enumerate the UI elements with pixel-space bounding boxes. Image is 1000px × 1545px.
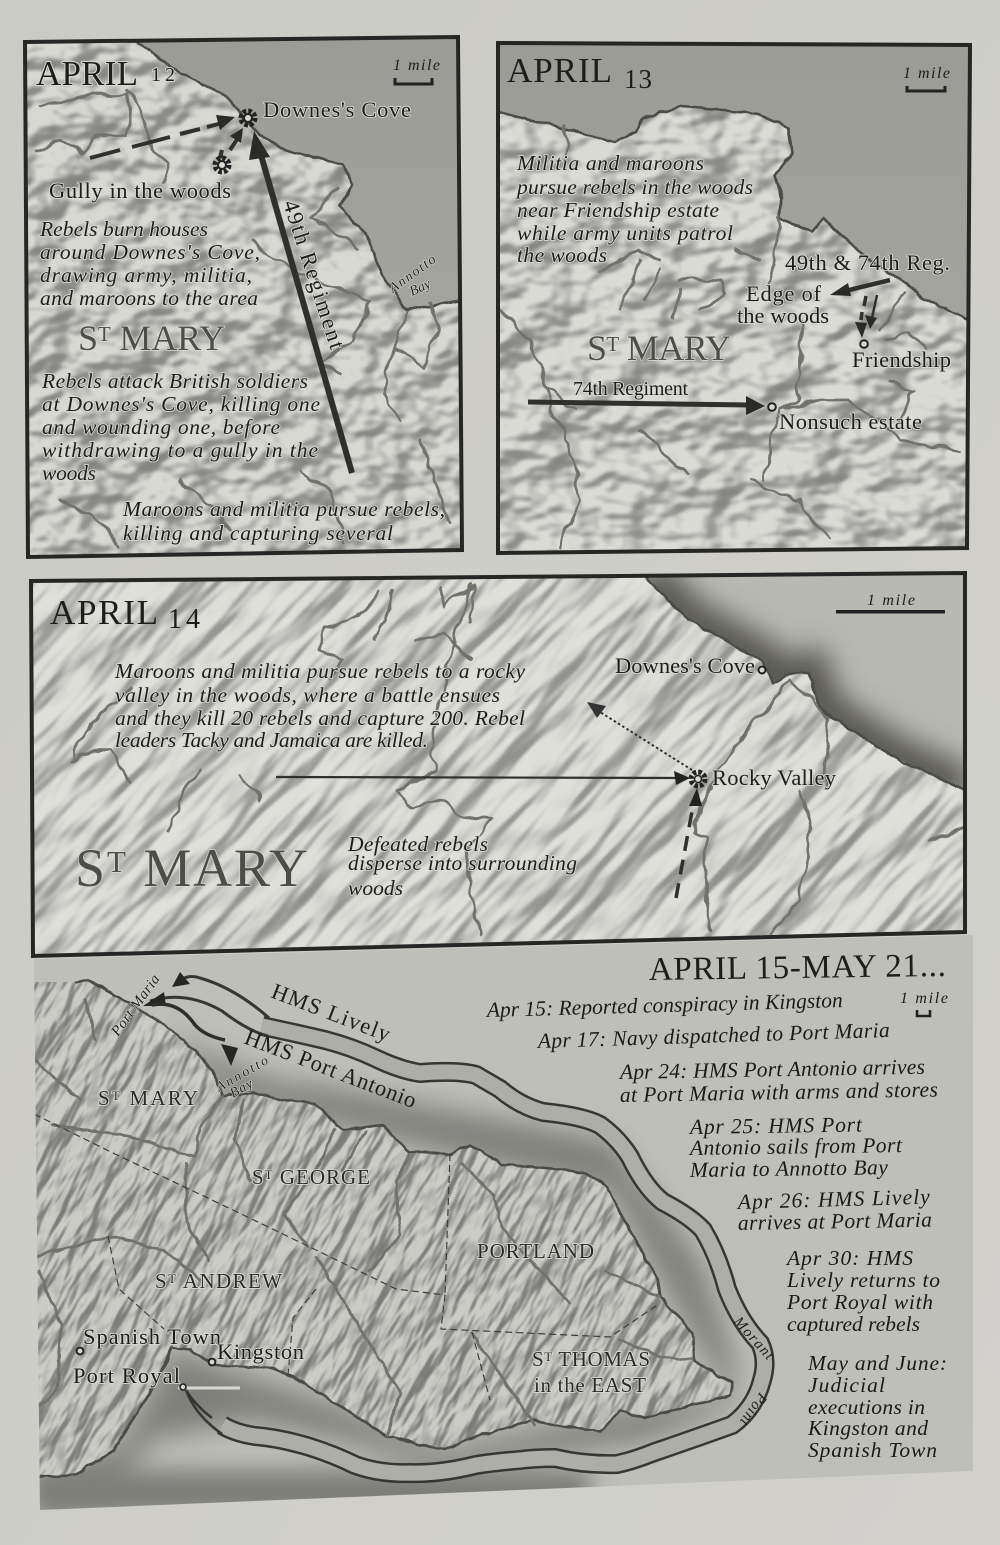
note: maroons and militia pursue rebels: and they kill 20 rebels and capture 200. Rebel (115, 706, 525, 730)
note: rebels burn houses: drawing army, militia, (40, 263, 252, 287)
timeline: April 30 (785, 1246, 940, 1336)
label: St Mary: T (112, 1088, 120, 1103)
timeline: April 15: Apr 15: Reported conspiracy in Kingston (484, 988, 843, 1022)
scale bar: 1 mile: 1 mile (867, 592, 915, 609)
label: St Andrew: S (155, 1269, 167, 1293)
note: militia and maroons: while army units patrol (517, 221, 733, 245)
icon: Rocky Valley battle marker (691, 772, 705, 786)
scale bar: 1 mile: 1 mile (393, 57, 440, 74)
note: defeated rebels: Defeated rebels (347, 832, 488, 856)
label: 74th Regiment: 74th Regiment (573, 378, 688, 400)
note: rebels attack soldiers: at Downes's Cove, killing one (42, 392, 320, 416)
timeline: April 24: at Port Maria with arms and stores (620, 1077, 938, 1107)
panel: April 12 map (20, 30, 465, 560)
timeline: April 24: Apr 24: HMS Port Antonio arrives (618, 1055, 925, 1084)
label: Portland: PORTLAND (477, 1239, 594, 1263)
arrow: HMS Lively to Port Maria (172, 972, 190, 987)
label: St George: GEORGE (274, 1165, 370, 1189)
timeline: April 25: Antonio sails from Port (688, 1133, 903, 1160)
label: St Thomas in the East: THOMAS (553, 1347, 650, 1371)
arrow: to Friendship dashed (855, 296, 867, 338)
note: militia and maroons: near Friendship estate (517, 198, 719, 222)
icon: Nonsuch estate marker (768, 403, 776, 411)
label: St Andrew: T (168, 1271, 176, 1286)
note: maroons and militia pursue rebels: leaders Tacky and Jamaica are killed. (115, 728, 428, 752)
timeline: April 26: arrives at Port Maria (738, 1208, 932, 1235)
note: militia and maroons (515, 151, 753, 267)
note: maroons and militia pursue rebels: valley in the woods, where a battle ensues (115, 683, 500, 707)
label: St Mary parish: S (587, 328, 607, 368)
label: St Mary parish: S (75, 838, 105, 898)
note: rebels burn houses (39, 217, 260, 310)
label: Morant Point: Morant (729, 1313, 777, 1364)
label: Kingston: Kingston (217, 1339, 304, 1364)
timeline: April 30: Port Royal with (786, 1290, 933, 1314)
icon: Friendship marker (860, 340, 868, 348)
note: maroons and militia pursue: Maroons and militia pursue rebels, (122, 497, 445, 521)
timeline: April 25 (688, 1113, 903, 1182)
heading: April 12: APRIL (36, 54, 138, 93)
panel: April 15 to May 21 map of eastern Jamaica (0, 935, 981, 1515)
label: Morant Point (729, 1313, 777, 1429)
note: rebels burn houses: Rebels burn houses (39, 217, 208, 241)
note: militia and maroons: pursue rebels in the woods (515, 175, 753, 199)
arrow: 74th Regiment (528, 396, 765, 415)
arrow: dashed route north (676, 788, 702, 898)
arrow: to Friendship solid (865, 295, 877, 329)
timeline: May and June: executions in (808, 1395, 925, 1419)
arrow: 49th Regiment (249, 131, 352, 473)
heading: date numerals: 13 (624, 64, 652, 94)
note: maroons and militia pursue rebels (114, 659, 525, 752)
label: Annotto Bay: Bay (407, 276, 434, 300)
heading: date numerals: 14 (168, 604, 200, 635)
note: rebels burn houses: and maroons to the area (40, 286, 258, 310)
label: St Mary parish: S (78, 318, 98, 358)
note: rebels attack soldiers: and wounding one, before (42, 415, 280, 439)
arrow: dashed rebel route to Downes's Cove (90, 115, 235, 158)
note: rebels attack soldiers: withdrawing to a gully in the (42, 438, 318, 462)
heading: April 13: APRIL (507, 51, 612, 90)
scale bar: 1 mile (900, 990, 948, 1016)
note: maroons and militia pursue (122, 497, 445, 545)
timeline: May and June: Spanish Town (808, 1438, 937, 1462)
icon: gully battle marker (215, 158, 229, 172)
label: St Mary parish: T (98, 322, 111, 346)
note: rebels attack soldiers: Rebels attack British soldiers (41, 369, 308, 393)
label: St Thomas in the East: T (544, 1349, 552, 1364)
label: St George: T (265, 1167, 273, 1182)
label: St Mary parish: T (107, 844, 126, 879)
label: Edge of the woods: Edge of (746, 281, 822, 306)
label: HMS Lively: HMS Lively (268, 978, 395, 1047)
label: St Thomas in the East: S (532, 1347, 544, 1371)
label: Rocky Valley: Rocky Valley (712, 765, 837, 790)
label: Morant Point: Point (736, 1389, 770, 1429)
label: St Mary parish: T (606, 332, 619, 356)
scale bar: 1 mile: 1 mile (903, 65, 950, 82)
label: Friendship: Friendship (852, 347, 951, 372)
label: HMS Port Antonio: HMS Port Antonio (241, 1024, 420, 1113)
label: Edge of the woods: the woods (737, 303, 829, 328)
label: Downes's Cove: Downes's Cove (263, 97, 411, 122)
arrow: militia march to Rocky Valley (276, 771, 690, 785)
label: Nonsuch estate: Nonsuch estate (779, 409, 922, 434)
label: St Mary parish: MARY (619, 328, 731, 368)
label: St Thomas in the East (532, 1347, 650, 1397)
label: St Mary parish: MARY (128, 838, 308, 898)
label: Port Maria: Port Maria (108, 972, 164, 1040)
timeline: April 17: Apr 17: Navy dispatched to Port Maria (535, 1018, 890, 1053)
arrow: to Edge of the woods (830, 280, 890, 296)
heading: April 15 to May 21: APRIL 15-MAY 21... (649, 948, 946, 988)
timeline: May and June (807, 1351, 947, 1462)
timeline: April 26: Apr 26: HMS Lively (735, 1185, 931, 1214)
timeline: April 30: Lively returns to (786, 1268, 940, 1292)
panel: April 13 map (495, 35, 975, 560)
note: rebels attack soldiers (41, 369, 320, 485)
label: Spanish Town: Spanish Town (83, 1324, 221, 1349)
timeline: April 30: Apr 30: HMS (785, 1246, 913, 1270)
label: Gully in the woods: Gully in the woods (49, 178, 231, 203)
heading: April 14: APRIL (50, 593, 158, 632)
label: St Thomas in the East: in the EAST (534, 1373, 646, 1397)
timeline: April 30: captured rebels (787, 1312, 920, 1336)
note: defeated rebels: woods (348, 876, 403, 900)
label: St Andrew: ANDREW (177, 1269, 282, 1293)
arrow: HMS Port Antonio to Port Maria (143, 992, 166, 1006)
timeline: May and June: Kingston and (807, 1416, 928, 1440)
icon: Downes's Cove marker (758, 666, 766, 674)
note: rebels burn houses: around Downes's Cove, (40, 240, 260, 264)
timeline: April 25: Maria to Annotto Bay (689, 1155, 889, 1182)
label: Annotto Bay: Bay (228, 1076, 256, 1101)
arrow: dotted rebel dispersal (587, 702, 692, 770)
timeline: April 24 (618, 1055, 938, 1107)
label: Edge of the woods (737, 281, 829, 328)
label: St Mary: MARY (122, 1086, 198, 1110)
arrow: HMS Port Antonio to Annotto Bay (152, 1004, 238, 1066)
route: HMS Lively and HMS Port Antonio double line (150, 977, 765, 1473)
scale bar: 1 mile (393, 57, 440, 84)
note: maroons and militia pursue: killing and capturing several (123, 521, 393, 545)
note: maroons and militia pursue rebels: Maroons and militia pursue rebels to a rocky (114, 659, 525, 683)
note: militia and maroons: Militia and maroons (516, 151, 704, 175)
timeline: May and June: Judicial (808, 1373, 885, 1397)
label: St George: S (252, 1165, 264, 1189)
label: 49th and 74th Regiments: 49th & 74th Reg. (785, 250, 950, 275)
timeline: April 25: Apr 25: HMS Port (688, 1113, 863, 1139)
note: defeated rebels (347, 832, 577, 900)
panel: April 14 map (0, 570, 1000, 960)
heading: date numerals: 12 (151, 64, 175, 86)
label: St Mary: S (98, 1086, 110, 1110)
note: militia and maroons: the woods (517, 243, 607, 267)
arrow: dashed route from gully (220, 128, 243, 158)
label: Annotto Bay: Annotto (213, 1053, 271, 1096)
icon: Downes's Cove battle marker (241, 111, 255, 125)
label: Port Royal: Port Royal (73, 1363, 180, 1388)
timeline: May and June: May and June: (807, 1351, 947, 1375)
note: rebels attack soldiers: woods (42, 461, 96, 485)
label: St Mary parish: MARY (111, 318, 225, 358)
timeline: April 26 (735, 1185, 932, 1235)
note: defeated rebels: disperse into surrounding (348, 851, 577, 875)
scale bar: 1 mile: 1 mile (900, 990, 948, 1007)
scale bar: 1 mile (903, 65, 950, 91)
label: 49th Regiment: 49th Regiment (278, 197, 350, 353)
label: Annotto Bay: Annotto (386, 252, 439, 297)
scale bar: 1 mile (836, 592, 945, 614)
label: Downes's Cove: Downes's Cove (615, 653, 755, 678)
